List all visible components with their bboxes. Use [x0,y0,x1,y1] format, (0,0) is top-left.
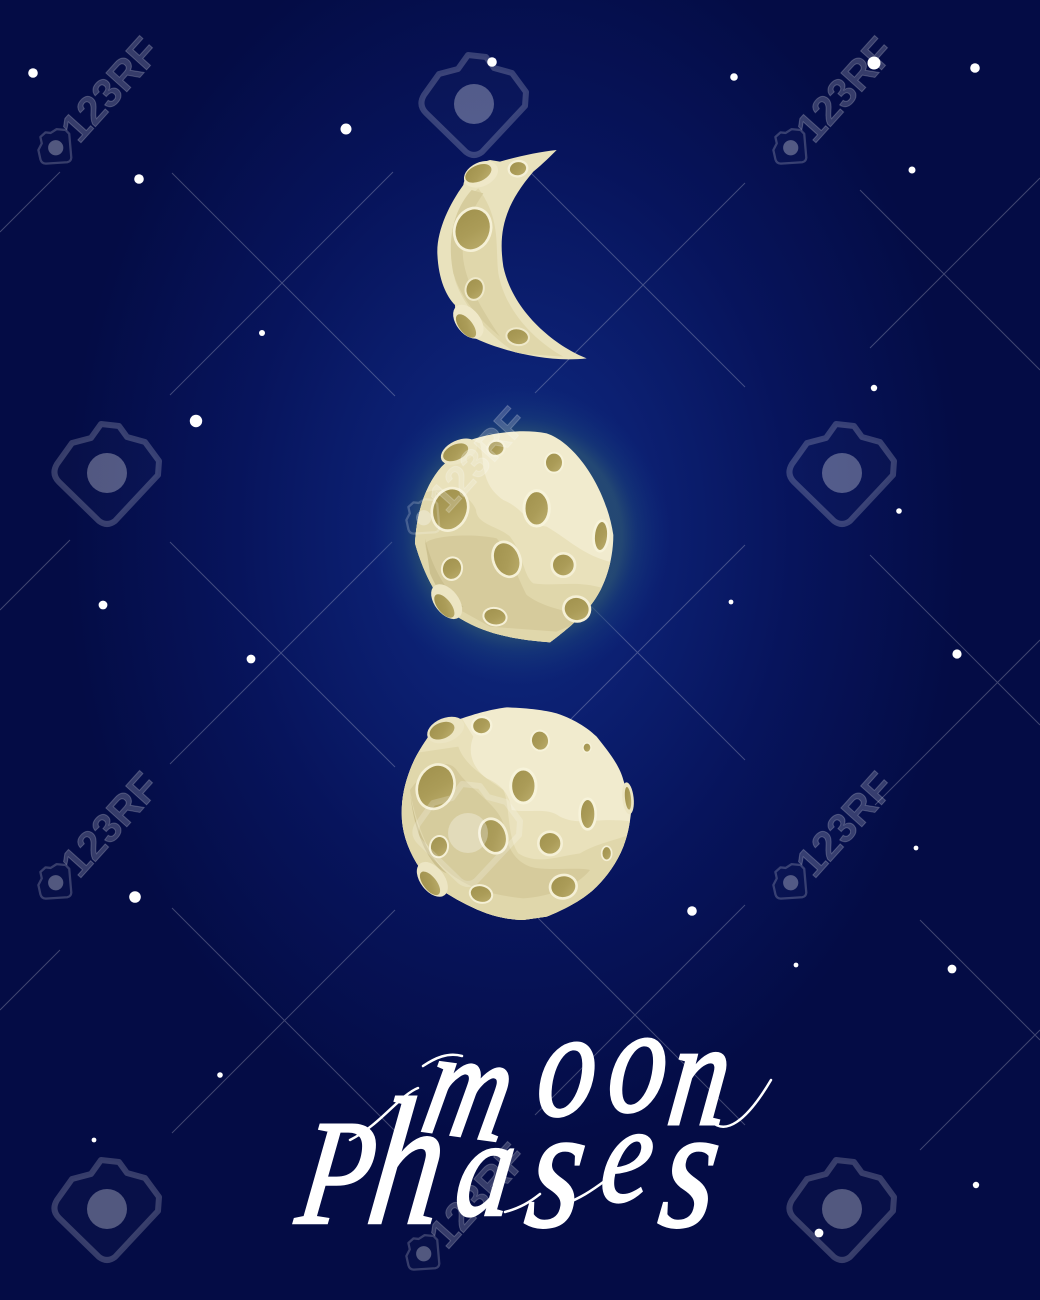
title: moon phases: P [289,1089,386,1256]
title: moon phases: s [517,1071,599,1264]
title: moon phases: o [591,974,686,1147]
title: moon phases [287,974,771,1264]
moon: full phase [390,707,635,930]
title: moon phases: h [358,1061,459,1263]
watermark: bottom right icon [789,1160,894,1260]
moon: gibbous phase [415,431,614,642]
title: moon phases: s [651,1071,732,1264]
watermark: bottom centre [394,1134,536,1285]
moon glow [370,385,670,685]
moon: crescent phase [437,150,587,359]
watermark: bottom left icon [54,1160,159,1260]
watermark: over middle moon: 123RF [420,398,536,521]
watermark: top right [761,28,903,179]
watermark: lower right [761,763,903,914]
watermark: icon over full moon [415,784,520,884]
watermark: top centre icon [421,55,526,155]
title: moon phases: a [448,1090,526,1246]
watermark: top left: 123RF [52,28,168,151]
watermark: lower left: 123RF [52,763,168,886]
title: moon phases: m [409,998,531,1174]
watermark: lower left [26,763,168,914]
watermark: middle left icon [54,424,159,524]
watermark: top left [26,28,168,179]
title: moon phases: o [520,978,616,1151]
watermark: over middle moon [394,398,536,549]
watermark: middle right icon [789,424,894,524]
title: moon phases: n [660,991,742,1157]
watermark: lower right: 123RF [787,763,903,886]
watermark: top right: 123RF [787,28,903,151]
title: moon phases: e [593,1076,665,1232]
watermark: bottom centre: 123RF [420,1134,536,1257]
